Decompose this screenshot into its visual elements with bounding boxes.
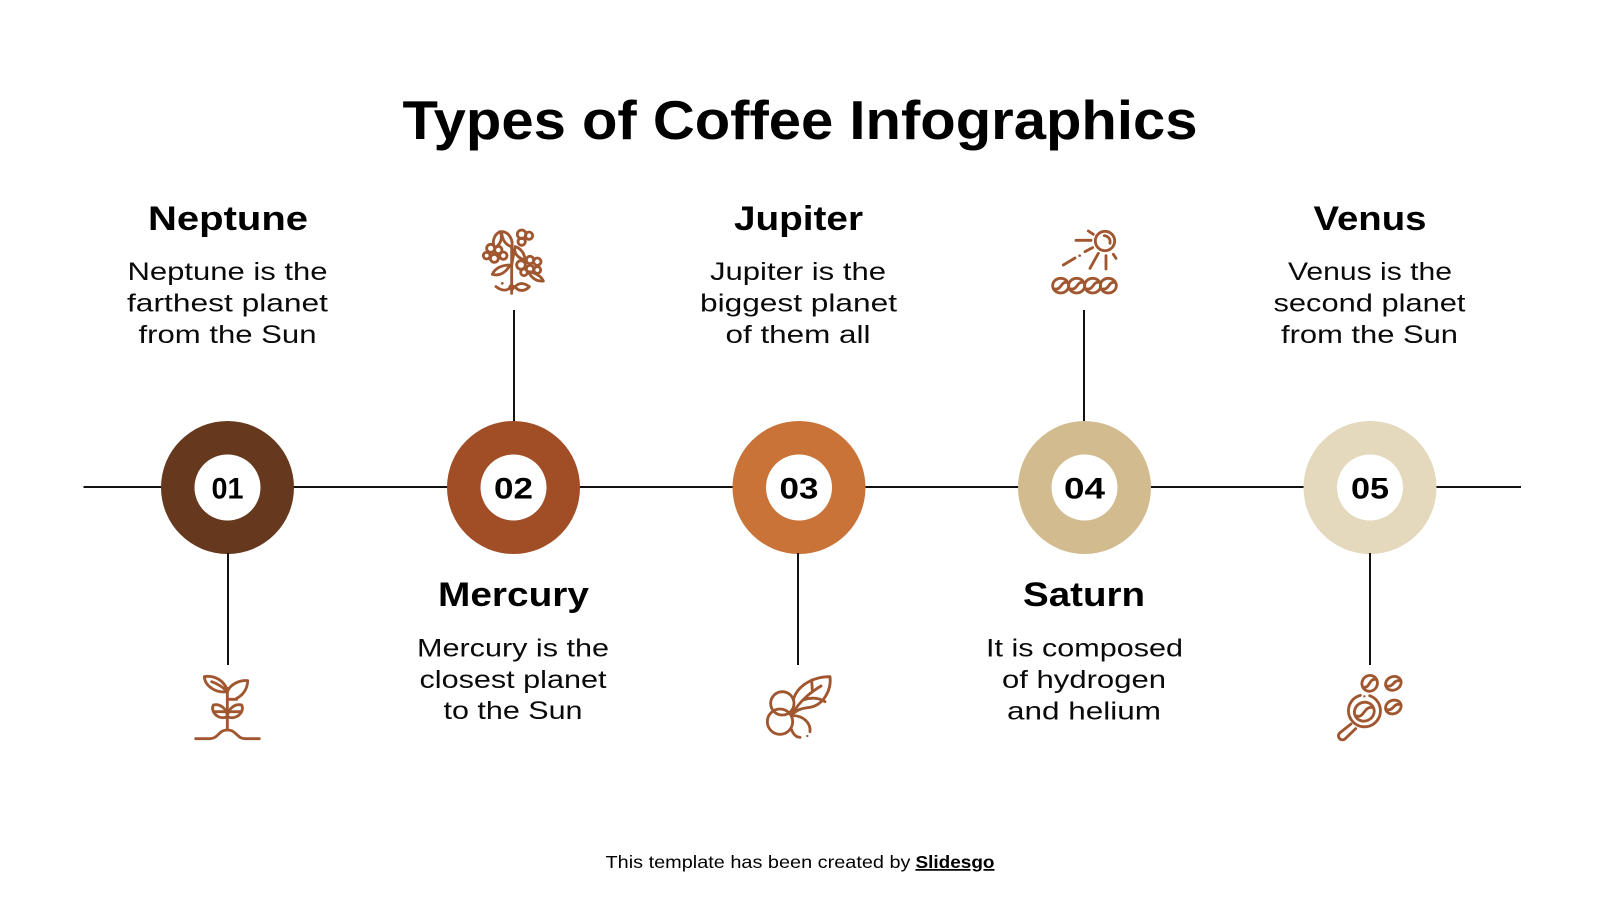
node 03 bbox=[732, 421, 866, 554]
text block: Venus description: second planet bbox=[1274, 290, 1466, 318]
text block: Saturn description: It is composed bbox=[986, 634, 1183, 662]
connector 05 bbox=[1369, 553, 1371, 665]
icon: magnifier over coffee beans bbox=[1338, 673, 1403, 740]
text block: Mercury description: Mercury is the bbox=[417, 634, 609, 662]
panel: step 03 Jupiter bbox=[700, 200, 897, 737]
text block: Jupiter description bbox=[700, 258, 897, 349]
node 02: 02 bbox=[494, 472, 533, 506]
title: Types of Coffee Infographics bbox=[402, 89, 1198, 151]
connector 01 bbox=[227, 553, 229, 665]
node 05 bbox=[1304, 421, 1436, 554]
timeline line bbox=[84, 486, 1521, 488]
text block: Mercury description bbox=[417, 634, 609, 725]
text block: Venus description: from the Sun bbox=[1281, 321, 1458, 349]
text block: Neptune description bbox=[127, 258, 328, 349]
heading: Saturn: Saturn bbox=[1023, 576, 1145, 614]
text block: Saturn description: of hydrogen bbox=[1002, 666, 1166, 694]
footer credit: Slidesgo bbox=[916, 852, 994, 872]
node 01: 01 bbox=[212, 472, 244, 506]
panel: step 05 Venus bbox=[1274, 200, 1466, 740]
heading: Venus: Venus bbox=[1314, 200, 1426, 238]
text block: Jupiter description: of them all bbox=[726, 321, 870, 349]
node 03: 03 bbox=[780, 472, 818, 506]
node 01 bbox=[161, 421, 294, 554]
text block: Jupiter description: Jupiter is the bbox=[710, 258, 886, 286]
node 05: 05 bbox=[1351, 472, 1389, 506]
heading: Jupiter: Jupiter bbox=[734, 200, 863, 238]
heading: Neptune: Neptune bbox=[148, 200, 308, 238]
heading: Mercury: Mercury bbox=[438, 576, 589, 614]
icon: coffee berries with leaf bbox=[767, 677, 830, 737]
connector 04 bbox=[1083, 310, 1085, 422]
text block: Neptune description: Neptune is the bbox=[128, 258, 328, 286]
text block: Venus description bbox=[1274, 258, 1466, 349]
node 04: 04 bbox=[1064, 472, 1105, 506]
connector 03 bbox=[797, 553, 799, 665]
text block: Neptune description: farthest planet bbox=[127, 290, 328, 318]
icon: coffee plant bbox=[483, 230, 543, 293]
node 04 bbox=[1018, 421, 1151, 554]
icon: sun drying coffee beans bbox=[1053, 231, 1116, 293]
footer credit bbox=[606, 852, 994, 872]
text block: Venus description: Venus is the bbox=[1288, 258, 1452, 286]
panel: step 01 Neptune bbox=[127, 200, 328, 739]
text block: Saturn description bbox=[986, 634, 1183, 726]
panel: step 02 Mercury bbox=[417, 230, 609, 725]
panel: step 04 Saturn bbox=[986, 231, 1183, 725]
text block: Jupiter description: biggest planet bbox=[700, 290, 897, 318]
text block: Neptune description: from the Sun bbox=[138, 321, 316, 349]
footer credit: This template has been created by bbox=[606, 852, 911, 872]
icon: seedling bbox=[196, 676, 259, 739]
connector 02 bbox=[513, 310, 515, 422]
text block: Mercury description: closest planet bbox=[420, 666, 607, 694]
text block: Saturn description: and helium bbox=[1007, 698, 1161, 726]
text block: Mercury description: to the Sun bbox=[444, 697, 582, 725]
node 02 bbox=[447, 421, 580, 554]
